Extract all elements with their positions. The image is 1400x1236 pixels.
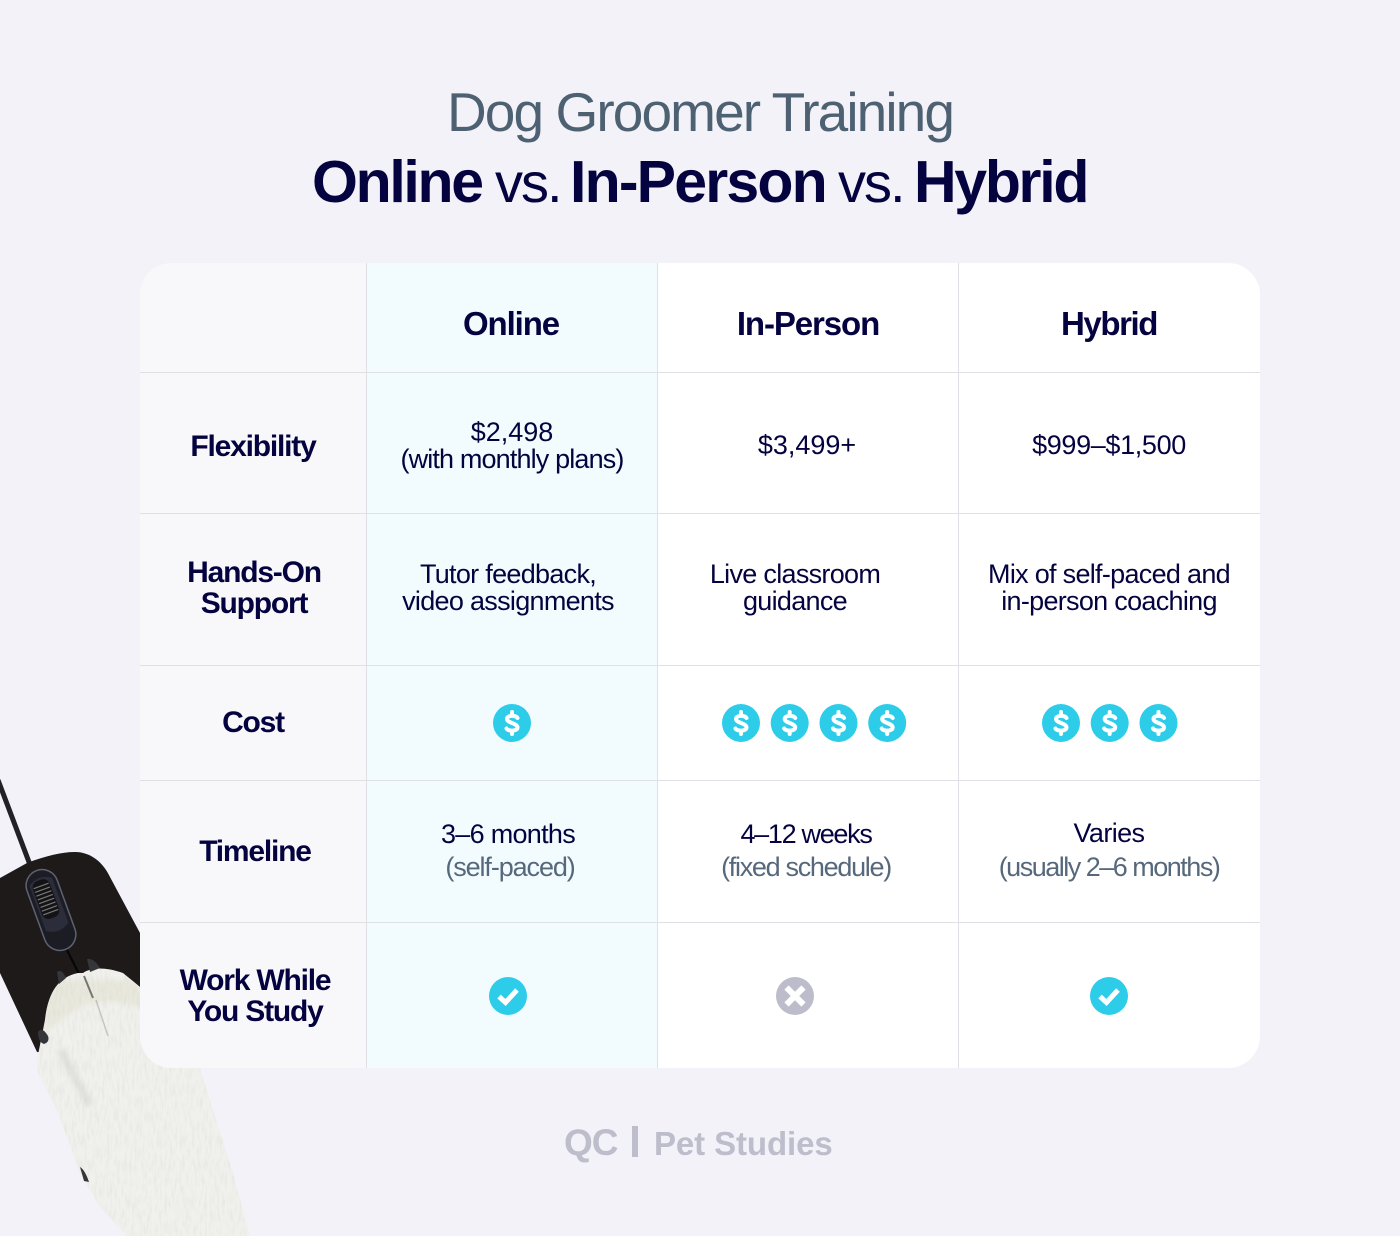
title: Dog Groomer Training <box>447 81 953 143</box>
support in-person: Live classroom <box>710 559 880 589</box>
subtitle: vs. <box>838 151 904 214</box>
cost icons: hybrid, three dollars <box>1042 704 1178 742</box>
comparison table card <box>140 263 1260 1068</box>
row label: work while you study <box>180 964 330 1028</box>
logo: QC Pet Studies <box>564 1122 833 1163</box>
flexibility hybrid: $999–$1,500 <box>1032 430 1186 460</box>
support in-person: guidance <box>743 586 847 616</box>
flexibility online <box>400 417 624 474</box>
flexibility online: (with monthly plans) <box>400 444 624 474</box>
illustration: dog paw on computer mouse <box>0 779 250 1236</box>
subtitle: In-Person <box>570 149 826 215</box>
row label: cost: Cost <box>222 706 284 739</box>
flexibility online: $2,498 <box>471 417 553 447</box>
support in-person <box>710 559 880 616</box>
row label: hands-on support <box>187 556 321 620</box>
icon: check online <box>489 977 527 1015</box>
flexibility in-person: $3,499+ <box>758 430 856 460</box>
support online: video assignments <box>402 586 614 616</box>
timeline hybrid: Varies <box>1074 818 1144 848</box>
cost icons: online, one dollar <box>493 704 531 742</box>
subtitle: vs. <box>495 151 561 214</box>
label column background <box>140 263 366 1068</box>
row label: hands-on support: Support <box>201 587 307 620</box>
timeline hybrid <box>999 818 1220 882</box>
cost icons: in-person, four dollars <box>722 704 906 742</box>
row label: hands-on support: Hands-On <box>187 556 321 589</box>
column heading: online: Online <box>463 305 559 342</box>
icon: check hybrid <box>1090 977 1128 1015</box>
subtitle <box>312 149 1087 215</box>
logo: QC Pet Studies: QC <box>564 1122 618 1163</box>
timeline in-person: (fixed schedule) <box>721 852 891 882</box>
column heading: in-person: In-Person <box>737 305 879 342</box>
subtitle: Online <box>312 149 482 215</box>
row label: work while you study: Work While <box>180 964 330 997</box>
timeline in-person: 4–12 weeks <box>740 819 872 849</box>
timeline in-person <box>721 819 891 882</box>
timeline online: (self-paced) <box>445 852 575 882</box>
row label: flexibility: Flexibility <box>190 430 316 463</box>
row label: work while you study: You Study <box>187 995 323 1028</box>
support hybrid: Mix of self-paced and <box>988 559 1230 589</box>
timeline online: 3–6 months <box>441 819 575 849</box>
support hybrid <box>988 559 1230 616</box>
logo: QC Pet Studies: Pet Studies <box>654 1125 833 1162</box>
subtitle: Hybrid <box>914 149 1087 215</box>
support online <box>402 559 614 616</box>
row label: timeline: Timeline <box>199 835 311 868</box>
timeline hybrid: (usually 2–6 months) <box>999 852 1219 882</box>
support hybrid: in-person coaching <box>1001 586 1217 616</box>
online column background <box>367 263 657 1068</box>
timeline online <box>441 819 575 882</box>
column heading: hybrid: Hybrid <box>1061 305 1157 342</box>
support online: Tutor feedback, <box>420 559 596 589</box>
icon: cross in-person <box>776 977 814 1015</box>
